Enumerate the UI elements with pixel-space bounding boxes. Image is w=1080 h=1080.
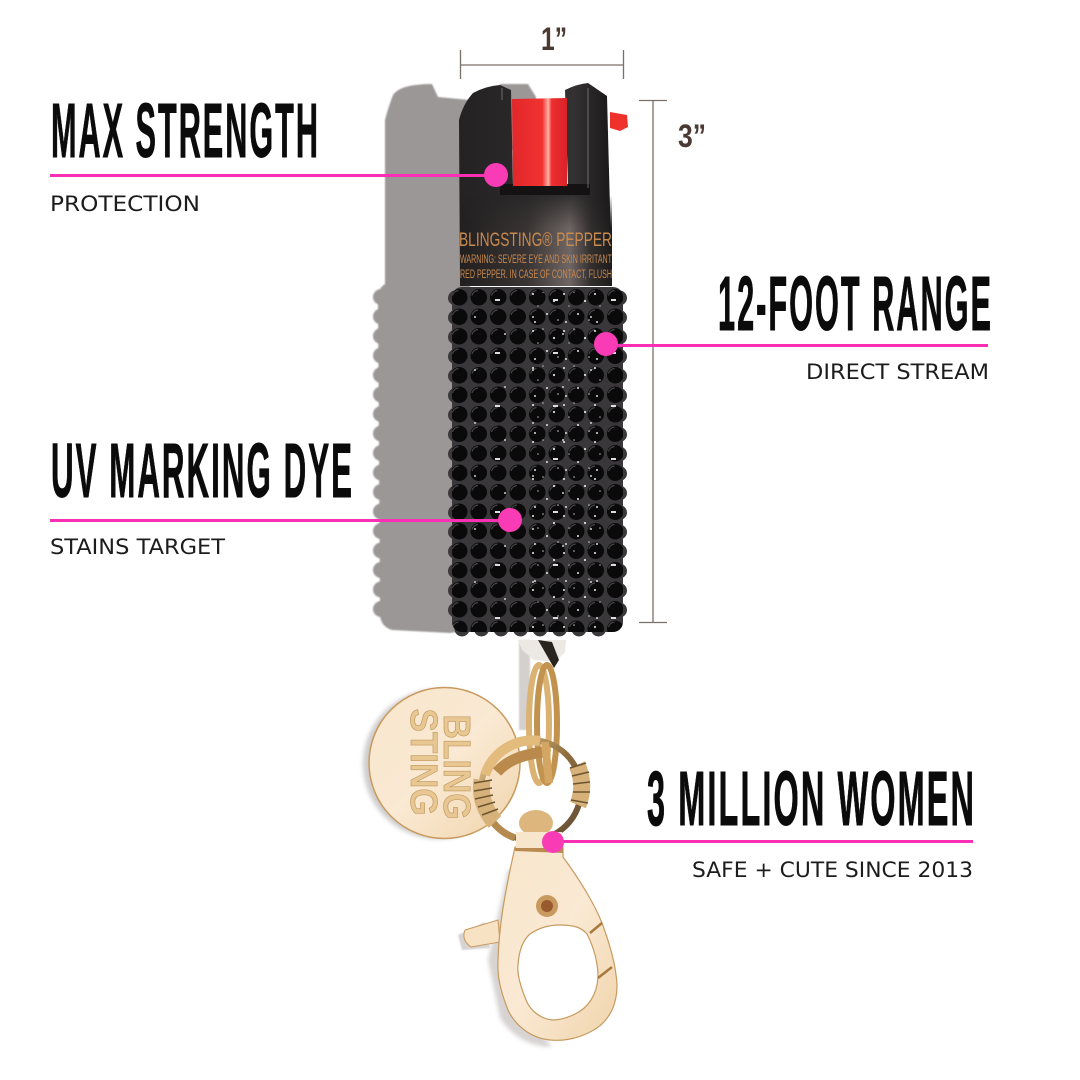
printed label text: RED PEPPER. IN CASE OF CONTACT, FLUSH [460,269,612,281]
leader line [606,344,988,347]
clasp shadow [488,870,552,1047]
leader line [50,174,496,177]
leader line [50,519,510,522]
callout: uv marking dye: UV MARKING DYE [51,428,354,514]
callout: 3 million women [542,756,976,882]
tag text: BLING: BLING [435,714,477,820]
connecting ring [474,740,590,840]
callout: max strength: MAX STRENGTH [51,88,320,174]
callout: max strength [50,88,508,216]
cap slot base [500,184,590,195]
product drop shadow [378,84,536,633]
printed label text: BLINGSTING® PEPPER [459,230,612,251]
marker dot [484,163,508,187]
tag shadow [363,689,513,839]
dimension: width 1 inch [460,21,624,79]
rhinestone body [452,287,623,632]
printed label text: WARNING: SEVERE EYE AND SKIN IRRITANT [460,252,612,266]
connector loop [518,640,566,668]
clasp swivel post [519,810,553,836]
leader line [553,840,973,843]
subheading: SAFE + CUTE SINCE 2013 [692,858,973,882]
round brand tag [369,688,520,838]
printed label band [460,196,612,286]
ring wire coils [481,765,582,822]
lever shadow [458,922,490,950]
marker dot [498,508,522,532]
dimension: height 3 inches: 3” [678,118,706,154]
tag text: STING: STING [402,708,444,816]
split ring shadow [519,640,530,730]
split key ring [529,665,557,783]
lobster clasp [464,810,617,1040]
marker dot [594,332,618,356]
dimension: height 3 inches [639,100,706,622]
keychain hardware [363,640,617,1047]
red piston front [512,98,567,186]
callout: uv marking dye [50,428,522,559]
subheading: PROTECTION [50,192,200,216]
pepper spray product [452,83,628,632]
clasp rivet [536,895,558,917]
dimension: width 1 inch: 1” [541,21,567,57]
subheading: STAINS TARGET [50,535,225,559]
red side tab [610,112,628,131]
printed label text [459,230,612,281]
cap post highlights [502,88,588,188]
front key ring segment [545,742,549,783]
subheading: DIRECT STREAM [806,360,989,384]
clasp neck [516,832,562,848]
black cap [459,83,612,283]
callout: 12-foot range [594,261,993,384]
marker dot [542,831,564,853]
